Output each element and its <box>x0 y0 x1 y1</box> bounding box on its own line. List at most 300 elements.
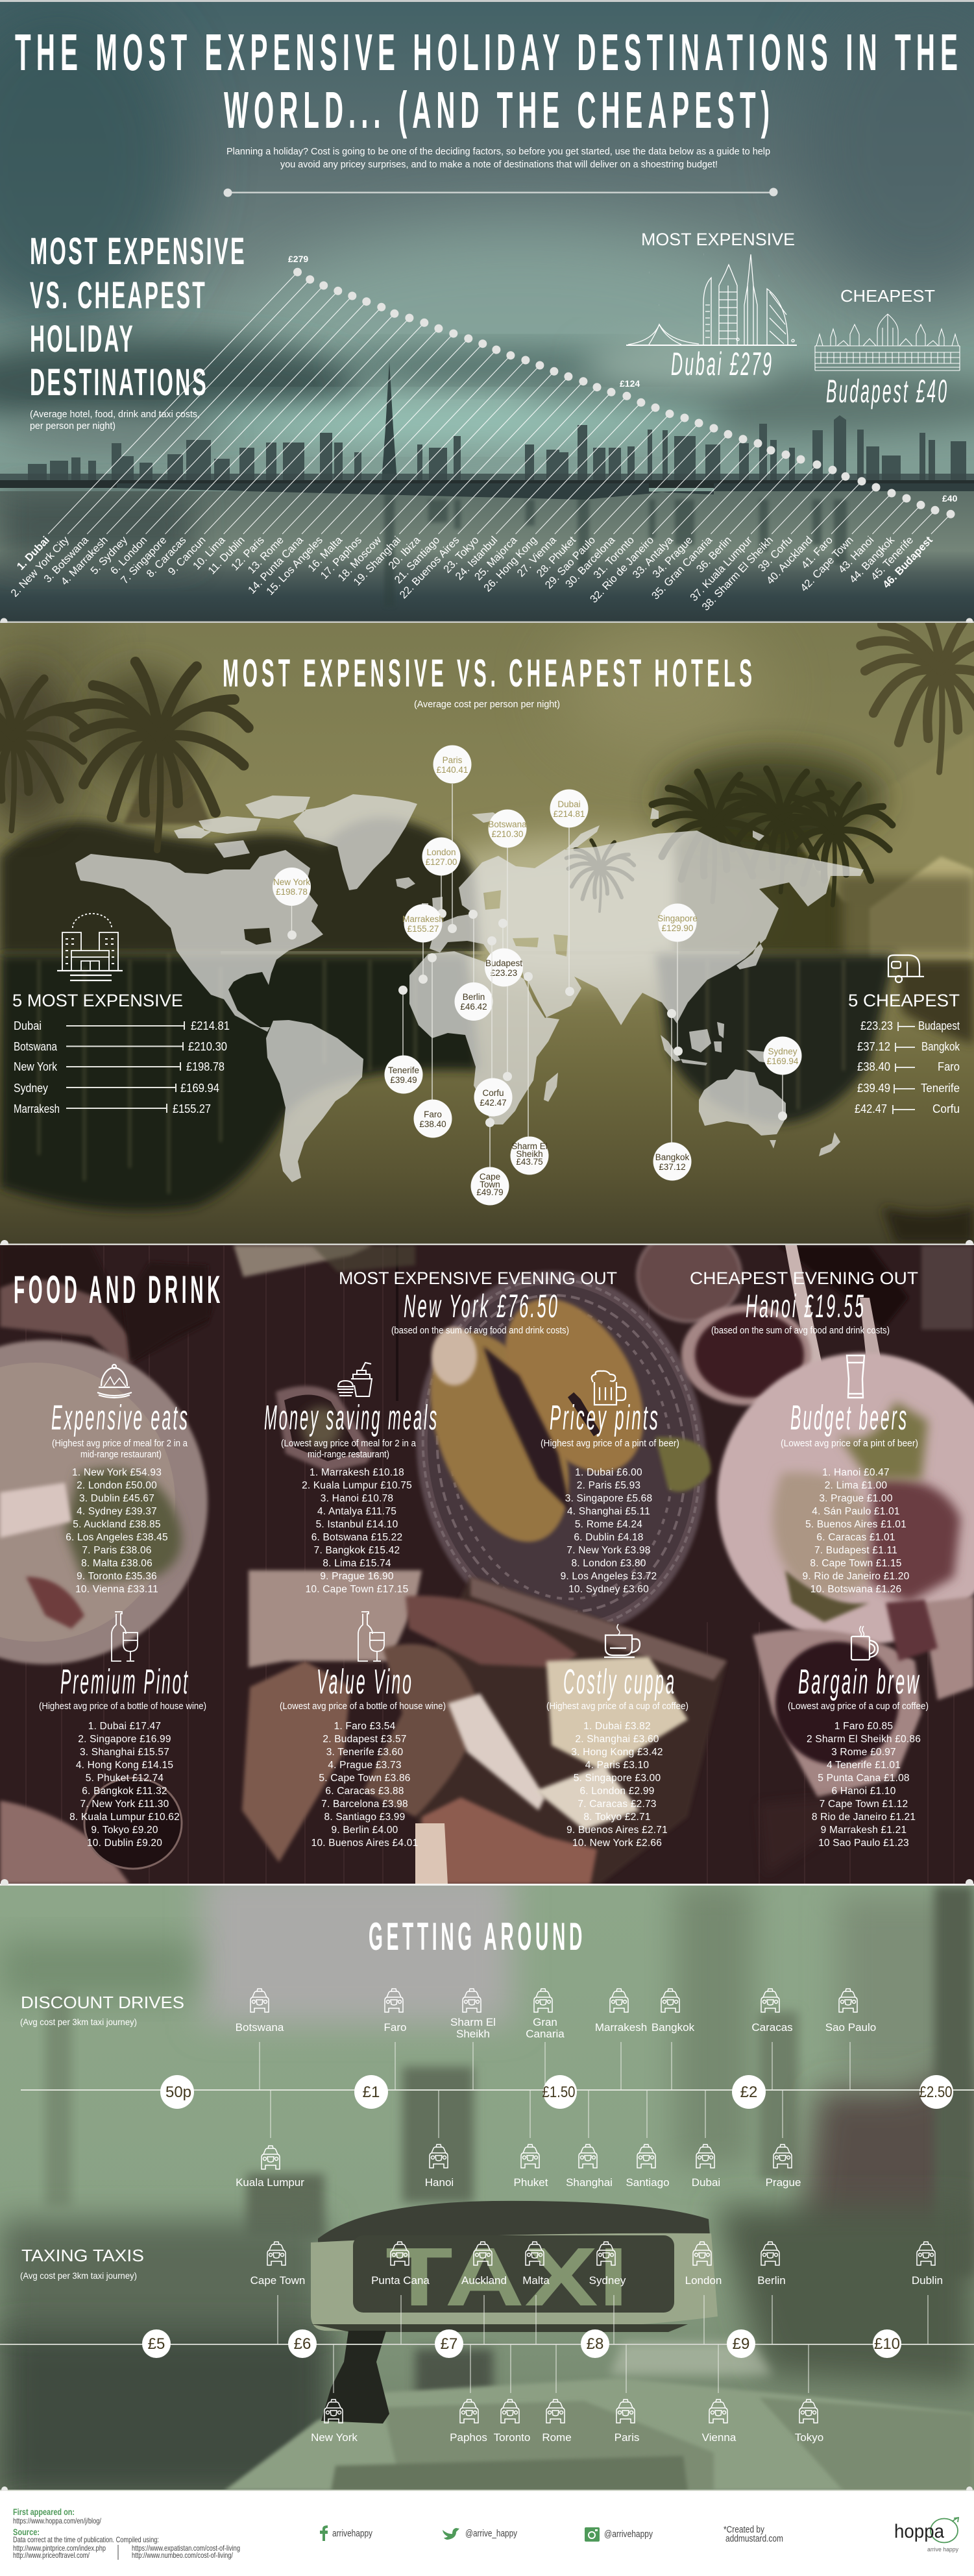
pin: London: £127.00 <box>426 857 457 867</box>
list: 5 most expensive hotels: Botswana <box>14 1040 58 1053</box>
block: expensive eats: 2. London £50.00 <box>77 1480 157 1491</box>
block: premium pinot: 9. Tokyo £9.20 <box>91 1825 158 1836</box>
section heading: most expensive vs cheapest holiday destinations: DESTINATIONS <box>30 361 208 404</box>
divider <box>0 618 974 626</box>
block: value vino: 5. Cape Town £3.86 <box>319 1773 411 1784</box>
sub-photo: right hand and glass <box>753 1596 974 1875</box>
list: 5 cheapest hotels: Faro <box>938 1060 960 1073</box>
chart: destination costs: 34. Prague <box>650 534 695 580</box>
list: 5 most expensive hotels: £155.27 <box>173 1102 211 1115</box>
chart: destination costs: 10. Lima <box>191 534 228 572</box>
heading: discount drives <box>20 1993 184 2027</box>
timeline: taxing taxis: £10 <box>874 2335 900 2353</box>
intro divider <box>223 188 777 197</box>
panel: food and drink: FOOD AND DRINK <box>14 1268 224 1311</box>
block: premium pinot: 4. Hong Kong £14.15 <box>76 1760 173 1771</box>
sub-photo: small olive bowl <box>276 1386 373 1472</box>
text: sources: Data correct at the time of publication. Compiled using: <box>13 2535 159 2544</box>
callout: most expensive evening out: New York £76.50 <box>404 1288 559 1324</box>
block: premium pinot: 10. Dublin £9.20 <box>87 1838 162 1849</box>
chart: destination costs: 37. Kuala Lumpur <box>688 534 755 603</box>
taxi: Kuala Lumpur <box>236 2146 304 2189</box>
timeline: discount drives: £1 <box>363 2084 380 2101</box>
heading: discount drives: DISCOUNT DRIVES <box>21 1993 184 2012</box>
text: created by: addmustard.com <box>725 2533 783 2544</box>
chart: destination costs: 11. Dublin <box>206 534 247 577</box>
intro paragraph: you avoid any pricey surprises, and to make a note of destinations that will deliver on a shoestring budget! <box>280 160 718 170</box>
block: value vino: 4. Prague £3.73 <box>328 1760 402 1771</box>
chart: destination costs: 26. Hong Kong <box>481 534 539 594</box>
block: pricey pints: 7. New York £3.98 <box>566 1545 651 1556</box>
text: first appeared on: https://www.hoppa.com/en/j/blog/ <box>13 2516 102 2525</box>
heading: taxing taxis <box>20 2246 144 2281</box>
pin: New York: New York <box>273 877 310 887</box>
icon: burger and drink <box>337 1363 372 1396</box>
panel: getting around <box>0 1869 974 2498</box>
block: premium pinot: 1. Dubai £17.47 <box>88 1721 161 1732</box>
chart: destination costs: 6. London <box>108 534 149 577</box>
pin: Budapest <box>485 919 523 986</box>
taxi: Gran Canaria <box>526 1989 565 2040</box>
block: pricey pints <box>541 1371 679 1595</box>
pin: Sharm El Sheikh: Sharm El <box>511 1141 548 1151</box>
block: money saving meals: 9. Prague 16.90 <box>320 1571 394 1582</box>
sub-photo: taxi sign <box>311 2201 718 2424</box>
block: costly cuppa: 4. Paris £3.10 <box>585 1760 649 1771</box>
block: budget beers: 3. Prague £1.00 <box>819 1493 893 1504</box>
block: costly cuppa: (Highest avg price of a cup of coffee) <box>546 1701 688 1712</box>
heading: taxing taxis: (Avg cost per 3km taxi journey) <box>20 2270 137 2281</box>
panel: most expensive vs cheapest destinations <box>0 0 974 623</box>
taxis below the taxing line <box>311 2400 823 2444</box>
block: pricey pints: 4. Shanghai £5.11 <box>567 1506 650 1517</box>
pin: Tenerife: Tenerife <box>388 1065 419 1075</box>
chart: destination costs: 1. Dubai <box>15 534 52 572</box>
chart: destination costs: 44. Bangkok <box>847 534 897 585</box>
block: budget beers: (Lowest avg price of a pint of beer) <box>781 1438 918 1449</box>
taxi: Dublin <box>912 2242 943 2287</box>
social: facebook: arrivehappy <box>332 2528 372 2539</box>
chart: destination costs: 39. Corfu <box>756 534 795 574</box>
pin: Botswana: £210.30 <box>492 829 523 839</box>
chart: destination costs: 35. Gran Canaria <box>650 534 715 602</box>
taxi: New York <box>311 2400 358 2444</box>
chart: destination costs: 4. Marrakesh <box>59 534 110 588</box>
list: 5 cheapest hotels <box>848 991 960 1115</box>
background: city skyline at dusk <box>0 0 974 623</box>
block: pricey pints: 2. Paris £5.93 <box>577 1480 640 1491</box>
block: costly cuppa: 6. London £2.99 <box>579 1786 655 1797</box>
pin: New York <box>273 868 311 940</box>
pin: Sydney: £169.94 <box>767 1056 799 1066</box>
pin: Tenerife <box>384 986 423 1094</box>
taxi: Marrakesh: Marrakesh <box>595 2021 647 2034</box>
block: value vino: 6. Caracas £3.88 <box>325 1786 404 1797</box>
icon: hotel <box>57 914 123 980</box>
icon: coffee mug <box>851 1626 878 1660</box>
pin: Marrakesh: Marrakesh <box>402 914 444 924</box>
block: expensive eats: 4. Sydney £39.37 <box>77 1506 157 1517</box>
chart: destination costs: 38. Sharm El Sheikh <box>700 534 775 613</box>
background: blurred street with taxi sign <box>0 1869 974 2498</box>
list: 5 most expensive hotels: Sydney <box>14 1082 48 1095</box>
pin: Cape Town <box>471 1118 509 1206</box>
pin: Sydney: Sydney <box>768 1047 797 1056</box>
chart: destination costs: 3. Botswana <box>42 534 91 585</box>
list: 5 cheapest hotels: Budapest <box>918 1019 960 1032</box>
block: expensive eats: 10. Vienna £33.11 <box>75 1584 158 1595</box>
block: premium pinot: 7. New York £11.30 <box>80 1799 169 1810</box>
taxi: Paris <box>615 2400 639 2444</box>
logo: hoppa <box>894 2518 958 2553</box>
heading: taxing taxis: TAXING TAXIS <box>21 2246 144 2265</box>
block: bargain brew: 8 Rio de Janeiro £1.21 <box>812 1812 916 1823</box>
list: 5 cheapest hotels: £23.23 <box>860 1019 893 1032</box>
taxis above the taxing line <box>250 2242 943 2287</box>
block: value vino: 1. Faro £3.54 <box>334 1721 396 1732</box>
logo: hoppa: hoppa <box>894 2521 944 2542</box>
text: sources: http://www.pintprice.com/index.php <box>13 2544 106 2553</box>
block: value vino: (Lowest avg price of a bottle of house wine) <box>280 1701 446 1712</box>
block: expensive eats: 9. Toronto £35.36 <box>77 1571 157 1582</box>
text: sources: Source: <box>13 2527 40 2537</box>
taxi: Malta: Malta <box>522 2274 550 2287</box>
panel: food and drink: Costly cuppa <box>563 1662 676 1701</box>
block: bargain brew: 1 Faro £0.85 <box>834 1721 893 1732</box>
taxi: Dubai: Dubai <box>692 2176 720 2189</box>
pin: Dubai <box>550 789 588 996</box>
list: 5 most expensive hotels: New York <box>14 1060 58 1073</box>
taxi: Dubai <box>692 2145 720 2189</box>
text: sources <box>13 2527 240 2560</box>
chart: destination costs: 36. Berlin <box>694 534 734 575</box>
block: pricey pints: 10. Sydney £3.60 <box>568 1584 649 1595</box>
block: value vino: 8. Santiago £3.99 <box>324 1812 405 1823</box>
chart: destination costs: 25. Majorca <box>472 534 520 583</box>
pin: Budapest: Budapest <box>485 958 522 968</box>
taxi: Sharm El Sheikh: Sheikh <box>456 2028 490 2040</box>
taxi: Auckland <box>461 2242 507 2287</box>
pin: Cape Town: £49.79 <box>476 1187 504 1197</box>
taxi: Sao Paulo <box>825 1989 876 2034</box>
pin: Sharm El Sheikh <box>510 972 549 1174</box>
callout: cheapest evening out: CHEAPEST EVENING OUT <box>690 1269 918 1288</box>
chart: destination costs: 18. Moscow <box>336 534 384 584</box>
block: budget beers: 4. Sán Paulo £1.01 <box>812 1506 900 1517</box>
taxi: Gran Canaria: Gran <box>533 2016 557 2028</box>
timeline: taxing taxis: £7 <box>441 2335 457 2353</box>
timeline: taxing taxis <box>0 2295 974 2393</box>
heading note <box>30 409 200 431</box>
pin: Corfu: Corfu <box>482 1088 504 1098</box>
block: premium pinot: (Highest avg price of a bottle of house wine) <box>39 1701 206 1712</box>
taxi: Berlin <box>757 2242 786 2287</box>
heading: cheapest callout: CHEAPEST <box>840 286 935 306</box>
taxi: Caracas <box>751 1989 793 2034</box>
list: 5 most expensive hotels <box>12 991 230 1115</box>
text: sources: http://www.numbeo.com/cost-of-living/ <box>132 2551 234 2560</box>
block: pricey pints: 5. Rome £4.24 <box>575 1519 642 1530</box>
pin: Botswana: Botswana <box>488 820 527 829</box>
taxi: Toronto <box>494 2400 530 2444</box>
block: pricey pints: 3. Singapore £5.68 <box>565 1493 652 1504</box>
block: value vino: 10. Buenos Aires £4.01 <box>311 1838 418 1849</box>
block: pricey pints: 9. Los Angeles £3.72 <box>561 1571 657 1582</box>
pin: Berlin: £46.42 <box>460 1002 487 1012</box>
pin: Berlin <box>454 910 493 1021</box>
block: value vino <box>280 1612 446 1849</box>
chart: destination costs: 14. Punta Cana <box>246 534 306 596</box>
sub-photo: top glass <box>637 1228 741 1322</box>
chart: destination costs: 22. Buenos Aires <box>398 534 462 601</box>
chart: destination costs: 42. Cape Town <box>798 534 856 594</box>
sub-photo: bottom-left hand and glass <box>0 1778 182 1884</box>
chart: destination costs: 16. Malta <box>306 534 345 574</box>
divider <box>0 1240 974 1248</box>
pin: Bangkok <box>653 1009 692 1181</box>
chart: destination costs: 13. Rome <box>246 534 286 576</box>
pin: Singapore <box>657 903 698 1056</box>
heading note: (Average hotel, food, drink and taxi costs, <box>30 409 200 420</box>
block: money saving meals <box>264 1363 439 1595</box>
list: 5 cheapest hotels: £42.47 <box>855 1102 887 1115</box>
block: budget beers: 5. Buenos Aires £1.01 <box>805 1519 907 1530</box>
chart: destination costs: 7. Singapore <box>119 534 169 587</box>
taxi: Auckland: Auckland <box>461 2274 507 2287</box>
block: pricey pints: Pricey pints <box>550 1398 660 1437</box>
chart: destination costs: 15. Los Angeles <box>264 534 325 598</box>
taxi: Phuket <box>514 2145 548 2189</box>
block: money saving meals: 7. Bangkok £15.42 <box>314 1545 400 1556</box>
taxi: Hanoi: Hanoi <box>425 2176 454 2189</box>
section heading: most expensive vs cheapest holiday destinations <box>30 237 244 396</box>
block: expensive eats: (Highest avg price of meal for 2 in a <box>52 1438 188 1449</box>
block: premium pinot: 8. Kuala Lumpur £10.62 <box>69 1812 180 1823</box>
timeline: taxing taxis: £6 <box>294 2335 311 2353</box>
taxi: Hanoi <box>425 2145 454 2189</box>
panel: food and drink <box>0 1228 974 1884</box>
sub-photo: sauce bowl <box>681 1304 811 1405</box>
block: budget beers: 8. Cape Town £1.15 <box>810 1558 902 1569</box>
timeline: taxing taxis: £9 <box>733 2335 749 2353</box>
section heading: most expensive vs cheapest holiday destinations: HOLIDAY <box>30 318 135 360</box>
background: tropical resort pool <box>0 603 974 1244</box>
chart: destination costs: 30. Barcelona <box>563 534 618 590</box>
pin: Singapore: £129.90 <box>662 923 693 933</box>
world map <box>75 794 864 1182</box>
pin: Cape Town: Cape <box>480 1172 500 1182</box>
block: budget beers <box>781 1355 918 1595</box>
pin: Corfu <box>474 936 513 1116</box>
block: expensive eats: 5. Auckland £38.85 <box>73 1519 161 1530</box>
pin: Corfu: £42.47 <box>480 1098 507 1108</box>
block: costly cuppa: 8. Tokyo £2.71 <box>583 1812 651 1823</box>
background: table with food <box>0 1228 974 1884</box>
taxi: Marrakesh <box>595 1989 647 2034</box>
pin: Cape Town: Town <box>480 1180 500 1189</box>
taxi: London <box>685 2242 722 2287</box>
text: first appeared on: First appeared on: <box>13 2507 75 2517</box>
chart: destination costs: 8. Caracas <box>145 534 189 580</box>
text: created by <box>724 2524 783 2544</box>
block: expensive eats: mid-range restaurant) <box>80 1449 162 1460</box>
pin: Marrakesh: £155.27 <box>408 924 439 934</box>
taxi: New York: New York <box>311 2431 358 2444</box>
block: budget beers: 2. Lima £1.00 <box>825 1480 887 1491</box>
block: money saving meals: 6. Botswana £15.22 <box>311 1532 402 1543</box>
taxi: Sydney <box>589 2242 626 2287</box>
list: 5 most expensive hotels: £210.30 <box>188 1040 227 1053</box>
pin: Faro: £38.40 <box>419 1119 446 1129</box>
sub-photo: car roof <box>224 2378 974 2491</box>
callout: most expensive evening out: MOST EXPENSIVE EVENING OUT <box>339 1269 617 1288</box>
timeline: taxing taxis: £8 <box>587 2335 603 2353</box>
taxi: Rome <box>542 2400 572 2444</box>
social: instagram <box>585 2527 653 2542</box>
timeline: discount drives: £1.50 <box>542 2084 575 2101</box>
sub-photo: left plate <box>0 1340 208 1664</box>
chart: destination costs: 28. Phuket <box>535 534 578 579</box>
pin: London <box>422 837 461 918</box>
taxi: London: London <box>685 2274 722 2287</box>
taxis above the discount line <box>236 1989 876 2040</box>
block: expensive eats: 7. Paris £38.06 <box>82 1545 152 1556</box>
taxi: Bangkok <box>651 1989 695 2034</box>
taxi: Gran Canaria: Canaria <box>526 2028 565 2040</box>
heading: discount drives: (Avg cost per 3km taxi journey) <box>20 2017 137 2027</box>
block: premium pinot <box>39 1612 206 1849</box>
logo: hoppa: arrive happy <box>927 2546 958 2553</box>
callout: most expensive evening out <box>339 1269 617 1336</box>
taxi: Berlin: Berlin <box>757 2274 786 2287</box>
sub-photo: right plate <box>717 1353 974 1645</box>
chart: destination costs: 45. Tenerife <box>869 534 916 583</box>
chart: destination costs: 46. Budapest <box>881 534 935 590</box>
chart: destination costs: 31. Toronto <box>591 534 637 581</box>
block: money saving meals: 4. Antalya £11.75 <box>317 1506 396 1517</box>
taxi: Faro <box>384 1989 406 2034</box>
block: value vino: 7. Barcelona £3.98 <box>321 1799 408 1810</box>
callout: most expensive evening out: (based on the sum of avg food and drink costs) <box>391 1325 569 1336</box>
taxi: Sharm El Sheikh <box>450 1989 496 2040</box>
text: created by: *Created by <box>724 2524 764 2535</box>
taxi: Paris: Paris <box>615 2431 639 2444</box>
taxi: Botswana: Botswana <box>236 2021 284 2034</box>
chart: destination costs: 33. Antalya <box>631 534 676 581</box>
chart: destination costs: £279 <box>288 254 308 264</box>
list: 5 cheapest hotels: Corfu <box>932 1102 960 1115</box>
panel: hotels <box>0 603 974 1244</box>
list: 5 cheapest hotels: Bangkok <box>921 1040 960 1053</box>
block: budget beers: 10. Botswana £1.26 <box>810 1584 901 1595</box>
block: pricey pints: 1. Dubai £6.00 <box>575 1467 642 1478</box>
taxi: Shanghai: Shanghai <box>566 2176 613 2189</box>
pin: Sharm El Sheikh: Sheikh <box>516 1149 543 1159</box>
taxi: Vienna <box>702 2400 737 2444</box>
pin: Paris: Paris <box>443 755 463 765</box>
chart: destination costs: 43. Hanoi <box>836 534 876 576</box>
timeline: discount drives <box>21 2042 974 2138</box>
taxi: Bangkok: Bangkok <box>651 2021 695 2034</box>
block: bargain brew: 9 Marrakesh £1.21 <box>821 1825 907 1836</box>
block: bargain brew: 5 Punta Cana £1.08 <box>818 1773 910 1784</box>
pin: Botswana <box>488 810 527 1081</box>
chart: destination costs: 5. Sydney <box>88 534 130 577</box>
block: budget beers: 1. Hanoi £0.47 <box>822 1467 890 1478</box>
list: 5 most expensive hotels: Marrakesh <box>14 1102 60 1115</box>
chart: destination costs: 9. Cancun <box>166 534 208 577</box>
chart: destination costs: 12. Paris <box>229 534 267 573</box>
taxi: Cape Town <box>250 2242 305 2287</box>
taxi: Cape Town: Cape Town <box>250 2274 305 2287</box>
block: bargain brew: 7 Cape Town £1.12 <box>820 1799 908 1810</box>
chart: destination costs: 23. Tokyo <box>441 534 481 576</box>
text: sources: https://www.expatistan.com/cost-of-living <box>132 2544 240 2553</box>
list: 5 most expensive hotels: £169.94 <box>180 1082 219 1095</box>
icon: cloche <box>97 1365 132 1398</box>
divider <box>0 2486 974 2493</box>
taxi: Vienna: Vienna <box>702 2431 737 2444</box>
text: sources: http://www.priceoftravel.com/ <box>13 2551 90 2560</box>
list: 5 cheapest hotels: Tenerife <box>921 1082 960 1095</box>
block: bargain brew: 3 Rome £0.97 <box>831 1747 896 1758</box>
block: bargain brew <box>788 1626 929 1849</box>
taxi: Sydney: Sydney <box>589 2274 626 2287</box>
block: pricey pints: 8. London £3.80 <box>571 1558 646 1569</box>
taxi: Kuala Lumpur: Kuala Lumpur <box>236 2176 304 2189</box>
chart: destination costs: 21. Santiago <box>393 534 442 586</box>
pin: Singapore: Singapore <box>657 914 698 923</box>
block: bargain brew: (Lowest avg price of a cup of coffee) <box>788 1701 929 1712</box>
block: money saving meals: 2. Kuala Lumpur £10.75 <box>302 1480 412 1491</box>
block: premium pinot: 6. Bangkok £11.32 <box>82 1786 167 1797</box>
icon: wine bottle and glass <box>358 1612 384 1661</box>
block: value vino: 3. Tenerife £3.60 <box>326 1747 403 1758</box>
block: costly cuppa: 3. Hong Kong £3.42 <box>571 1747 663 1758</box>
taxi: Dublin: Dublin <box>912 2274 943 2287</box>
chart: destination costs: £40 <box>942 493 958 504</box>
icon: caravan <box>888 955 924 982</box>
pin: Dubai: £214.81 <box>554 809 585 819</box>
block: pricey pints: (Highest avg price of a pint of beer) <box>541 1438 679 1449</box>
timeline: taxing taxis: £5 <box>148 2335 165 2353</box>
top strip <box>0 0 974 2</box>
taxi: Rome: Rome <box>542 2431 572 2444</box>
timeline: discount drives: 50p <box>165 2084 191 2101</box>
taxi: Malta <box>522 2242 550 2287</box>
block: costly cuppa: 9. Buenos Aires £2.71 <box>566 1825 668 1836</box>
pin: Bangkok: Bangkok <box>655 1152 690 1162</box>
block: budget beers: 6. Caracas £1.01 <box>816 1532 895 1543</box>
list: 5 most expensive hotels: £198.78 <box>186 1060 225 1073</box>
icon: Dubai skyline <box>626 254 797 345</box>
taxi: Santiago <box>626 2145 670 2189</box>
block: value vino: Value Vino <box>317 1662 413 1701</box>
sub-photo: cutting board <box>242 1570 727 1884</box>
taxi: Santiago: Santiago <box>626 2176 670 2189</box>
taxi: Paphos: Paphos <box>450 2431 487 2444</box>
block: money saving meals: (Lowest avg price of meal for 2 in a <box>281 1438 417 1449</box>
block: costly cuppa <box>546 1624 688 1849</box>
heading note: per person per night) <box>30 420 116 431</box>
list: 5 most expensive hotels: 5 MOST EXPENSIVE <box>12 991 183 1010</box>
list: 5 most expensive hotels: £214.81 <box>191 1019 230 1032</box>
chart: destination costs: 17. Paphos <box>319 534 364 581</box>
list: 5 most expensive hotels: Dubai <box>14 1019 42 1032</box>
intro paragraph: Planning a holiday? Cost is going to be one of the deciding factors, so before you get started, use the data below as a guide to help <box>226 147 770 157</box>
chart: destination costs: 27. Vienna <box>515 534 559 579</box>
icon: Budapest parliament <box>815 314 960 371</box>
